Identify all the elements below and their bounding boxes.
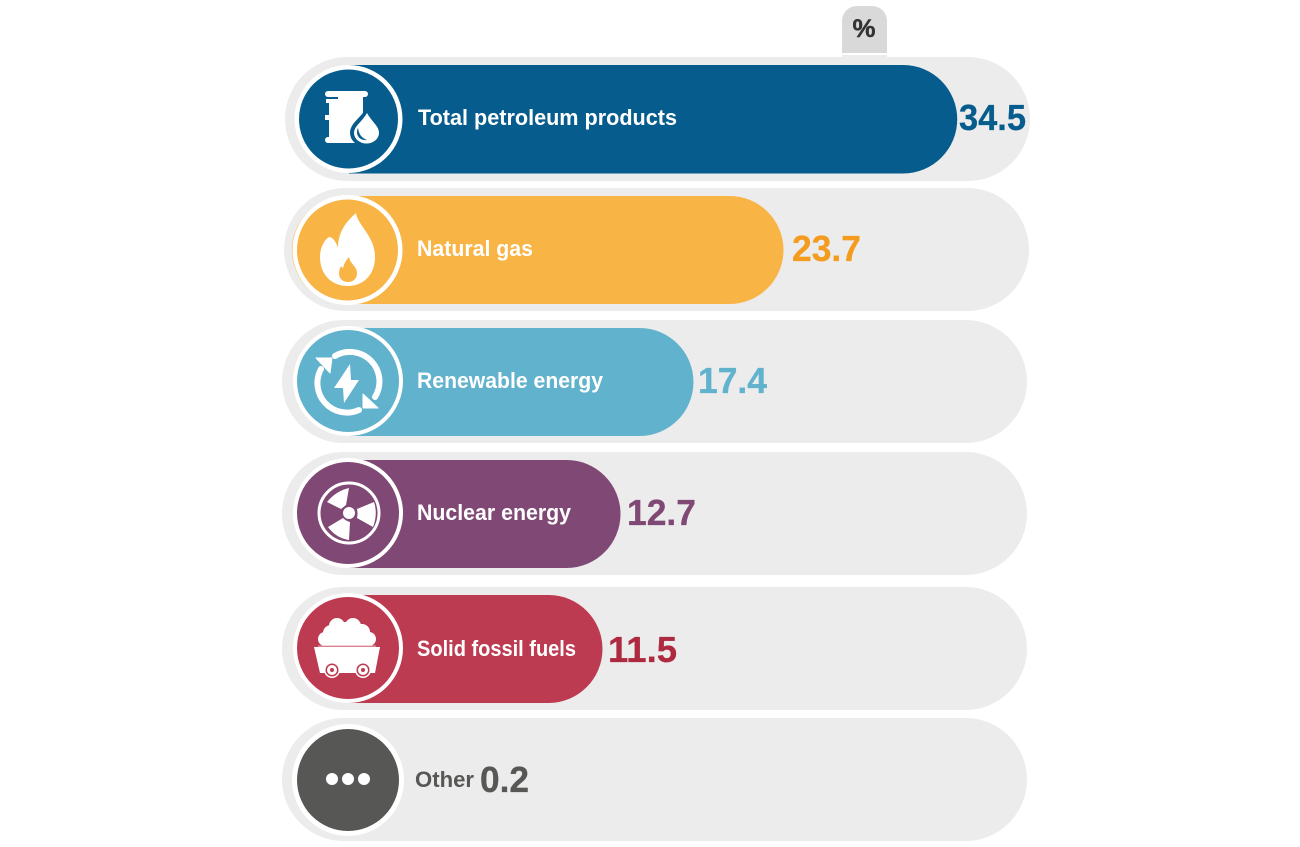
label: Total petroleum products: [418, 105, 677, 130]
value: 23.7: [792, 228, 861, 269]
bar: total petroleum products: [349, 65, 957, 174]
row: solid fossil fuels: [282, 587, 1027, 710]
label: Renewable energy: [417, 368, 604, 393]
row: renewable energy: [282, 320, 1027, 443]
value: 34.5: [959, 97, 1026, 138]
icon: radiation symbol: [293, 458, 403, 568]
row: total petroleum products: [285, 57, 1030, 181]
label: Nuclear energy: [417, 500, 572, 525]
icon: coal cart: [293, 593, 403, 703]
value: 12.7: [627, 492, 696, 533]
row: nuclear energy: [282, 452, 1027, 575]
row: natural gas: [284, 188, 1029, 311]
row: other: [282, 718, 1027, 841]
value: 11.5: [608, 629, 677, 670]
label: Other: [415, 767, 474, 792]
icon: flame: [292, 195, 402, 305]
unit tab: percent: %: [852, 15, 876, 43]
bar: renewable energy: [348, 328, 693, 436]
icon: three dots: [292, 724, 404, 836]
bar: natural gas: [292, 196, 784, 304]
bar: nuclear energy: [348, 460, 620, 568]
icon: renewable cycle with bolt: [293, 326, 403, 436]
unit tab: percent: [842, 6, 887, 58]
value: 0.2: [480, 759, 529, 800]
icon: oil barrel and drop: [294, 65, 402, 173]
bar: solid fossil fuels: [348, 595, 602, 703]
label: Natural gas: [417, 236, 533, 261]
value: 17.4: [698, 360, 767, 401]
label: Solid fossil fuels: [417, 636, 576, 661]
